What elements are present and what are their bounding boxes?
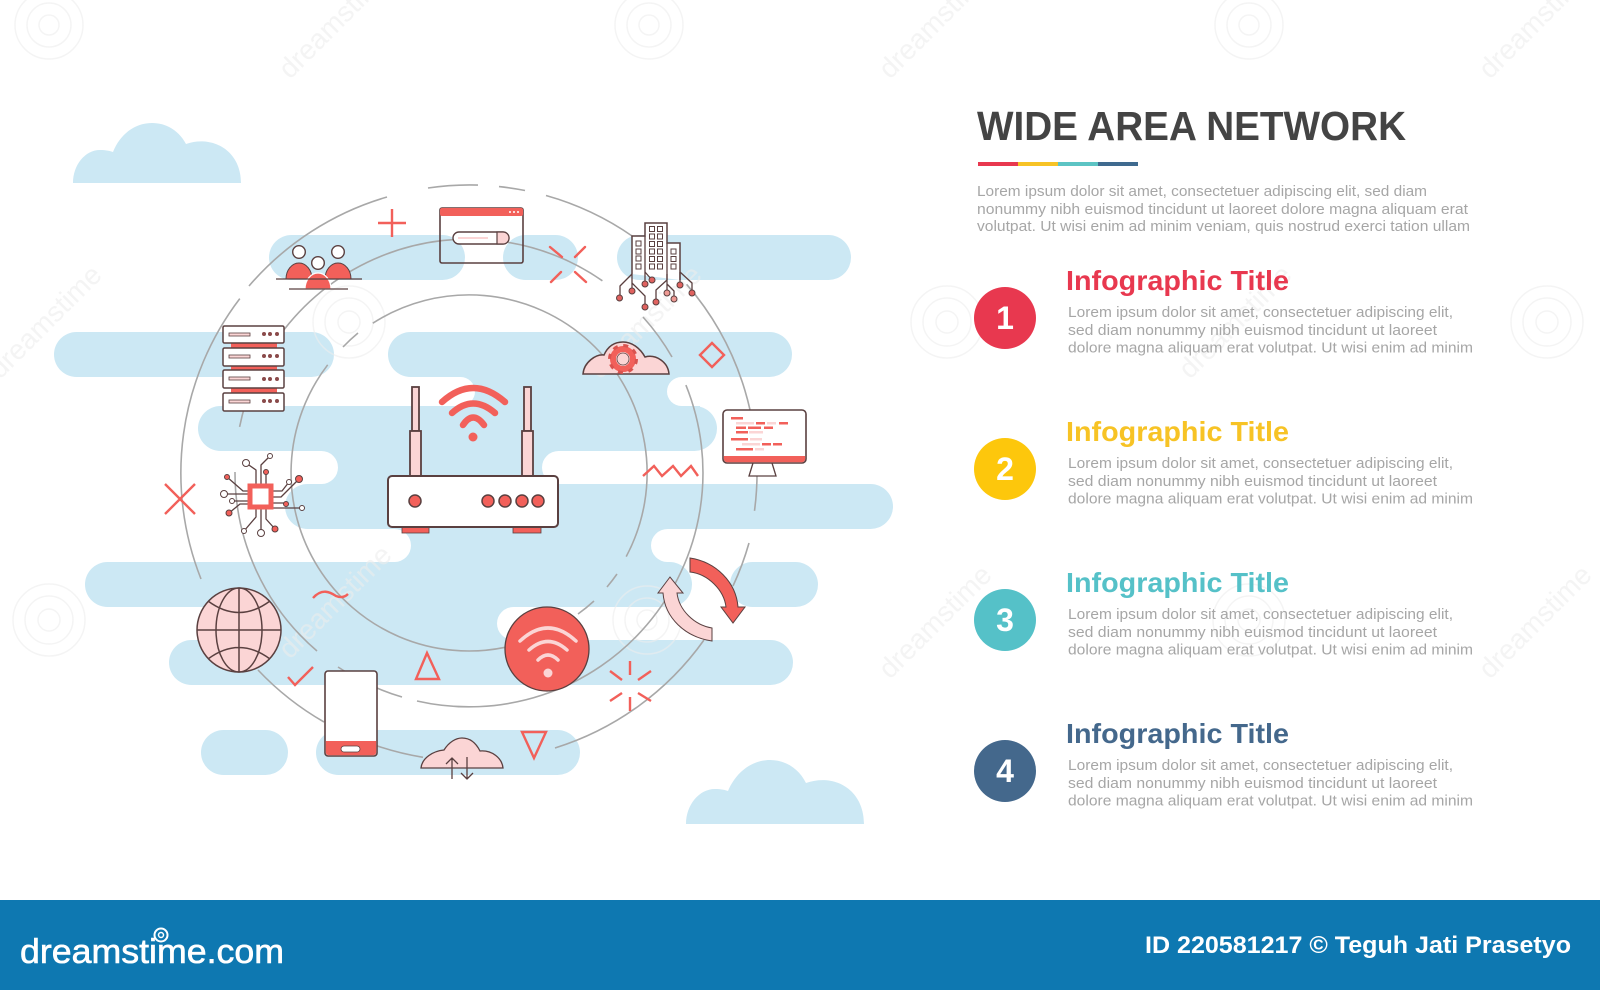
icon: zigzag mark (643, 466, 698, 476)
intro paragraph: Lorem ipsum dolor sit amet, consectetuer adipiscing elit, sed diam (977, 183, 1427, 200)
icon: triangle down (522, 732, 546, 758)
watermark spirals and text: dreamstime (582, 259, 708, 384)
title: WIDE AREA NETWORK (977, 103, 1406, 149)
item 2 title: Infographic Title (1066, 416, 1289, 447)
background clouds and pills (54, 123, 893, 824)
icon: triangle up (416, 653, 439, 679)
watermark spirals and text: dreamstime (872, 559, 998, 684)
item 4 text: sed diam nonummy nibh euismod tincidunt ut laoreet (1068, 775, 1438, 792)
icon: server rack (223, 326, 284, 411)
icon: gear cloud (583, 342, 669, 374)
item 2 text: sed diam nonummy nibh euismod tincidunt ut laoreet (1068, 473, 1438, 490)
cloud: bottom right (686, 760, 864, 824)
item 1 text (1068, 304, 1473, 356)
icon: check mark (288, 667, 313, 685)
icon: spark mark (610, 661, 651, 711)
icon: cycle arrows (658, 558, 745, 641)
item 2 text: Lorem ipsum dolor sit amet, consectetuer adipiscing elit, (1068, 455, 1453, 472)
icon: chip circuit (220, 454, 304, 536)
item 1 text: dolore magna aliquam erat volutpat. Ut wisi enim ad minim (1068, 340, 1473, 356)
badge 2 (974, 438, 1036, 500)
icon: diamond mark (700, 343, 724, 367)
item 3 text: dolore magna aliquam erat volutpat. Ut wisi enim ad minim (1068, 642, 1473, 658)
icon: router with wifi (388, 387, 558, 533)
icon: code monitor (723, 410, 806, 476)
icon: people group (276, 246, 362, 289)
watermark spirals and text: dreamstime (1172, 259, 1298, 384)
icon: wifi circle (505, 607, 589, 691)
watermark spirals and text: dreamstime (1472, 559, 1598, 684)
icon: smartphone (325, 671, 377, 756)
item 4 (974, 718, 1473, 810)
cloud: top left (73, 123, 241, 183)
item 1 title: Infographic Title (1066, 265, 1289, 296)
item 2 text: dolore magna aliquam erat volutpat. Ut wisi enim ad minim (1068, 490, 1473, 508)
icon: browser window (440, 208, 523, 263)
intro paragraph: volutpat. Ut wisi enim ad minim veniam, quis nostrud exerci tation ullam (977, 218, 1470, 235)
item 1 (974, 265, 1473, 356)
item 3 text: sed diam nonummy nibh euismod tincidunt ut laoreet (1068, 624, 1438, 641)
item 1 text: Lorem ipsum dolor sit amet, consectetuer adipiscing elit, (1068, 304, 1453, 321)
item 3 (974, 567, 1473, 658)
watermark spirals and text: dreamstime (272, 539, 398, 664)
intro paragraph (977, 183, 1470, 235)
icon: tilde mark (313, 592, 348, 598)
concentric dashed rings (181, 185, 757, 757)
icon: x burst mark (550, 247, 586, 282)
item 3 text: Lorem ipsum dolor sit amet, consectetuer adipiscing elit, (1068, 606, 1453, 623)
item 2 (974, 416, 1473, 508)
icon: upload download cloud (421, 738, 503, 779)
footer bar (0, 900, 1600, 990)
item 2 text (1068, 455, 1473, 508)
intro paragraph: nonummy nibh euismod tincidunt ut laoreet dolore magna aliquam erat (977, 201, 1469, 218)
badge 3 (974, 589, 1036, 651)
icon: buildings with circuit (616, 223, 695, 310)
icon: plus mark (378, 209, 406, 237)
badge 3: 3 (996, 602, 1014, 638)
badge 4 (974, 740, 1036, 802)
item 1 text: sed diam nonummy nibh euismod tincidunt ut laoreet (1068, 322, 1438, 339)
badge 2: 2 (996, 451, 1014, 487)
icon: x mark (165, 484, 195, 514)
item 3 text (1068, 606, 1473, 658)
icon: globe (197, 588, 281, 672)
item 4 text (1068, 757, 1473, 810)
item 4 title: Infographic Title (1066, 718, 1289, 749)
footer logo: dreamstime.com (20, 933, 284, 971)
title underline (978, 162, 1138, 166)
badge 4: 4 (996, 753, 1014, 789)
item 4 text: Lorem ipsum dolor sit amet, consectetuer adipiscing elit, (1068, 757, 1453, 774)
blob connectors (240, 370, 851, 646)
badge 1: 1 (996, 300, 1014, 336)
row pills (54, 235, 893, 775)
badge 1 (974, 287, 1036, 349)
item 3 title: Infographic Title (1066, 567, 1289, 598)
watermark spirals and text (0, 0, 1598, 684)
item 4 text: dolore magna aliquam erat volutpat. Ut wisi enim ad minim (1068, 792, 1473, 810)
footer credit: ID 220581217 © Teguh Jati Prasetyo (1145, 932, 1571, 959)
